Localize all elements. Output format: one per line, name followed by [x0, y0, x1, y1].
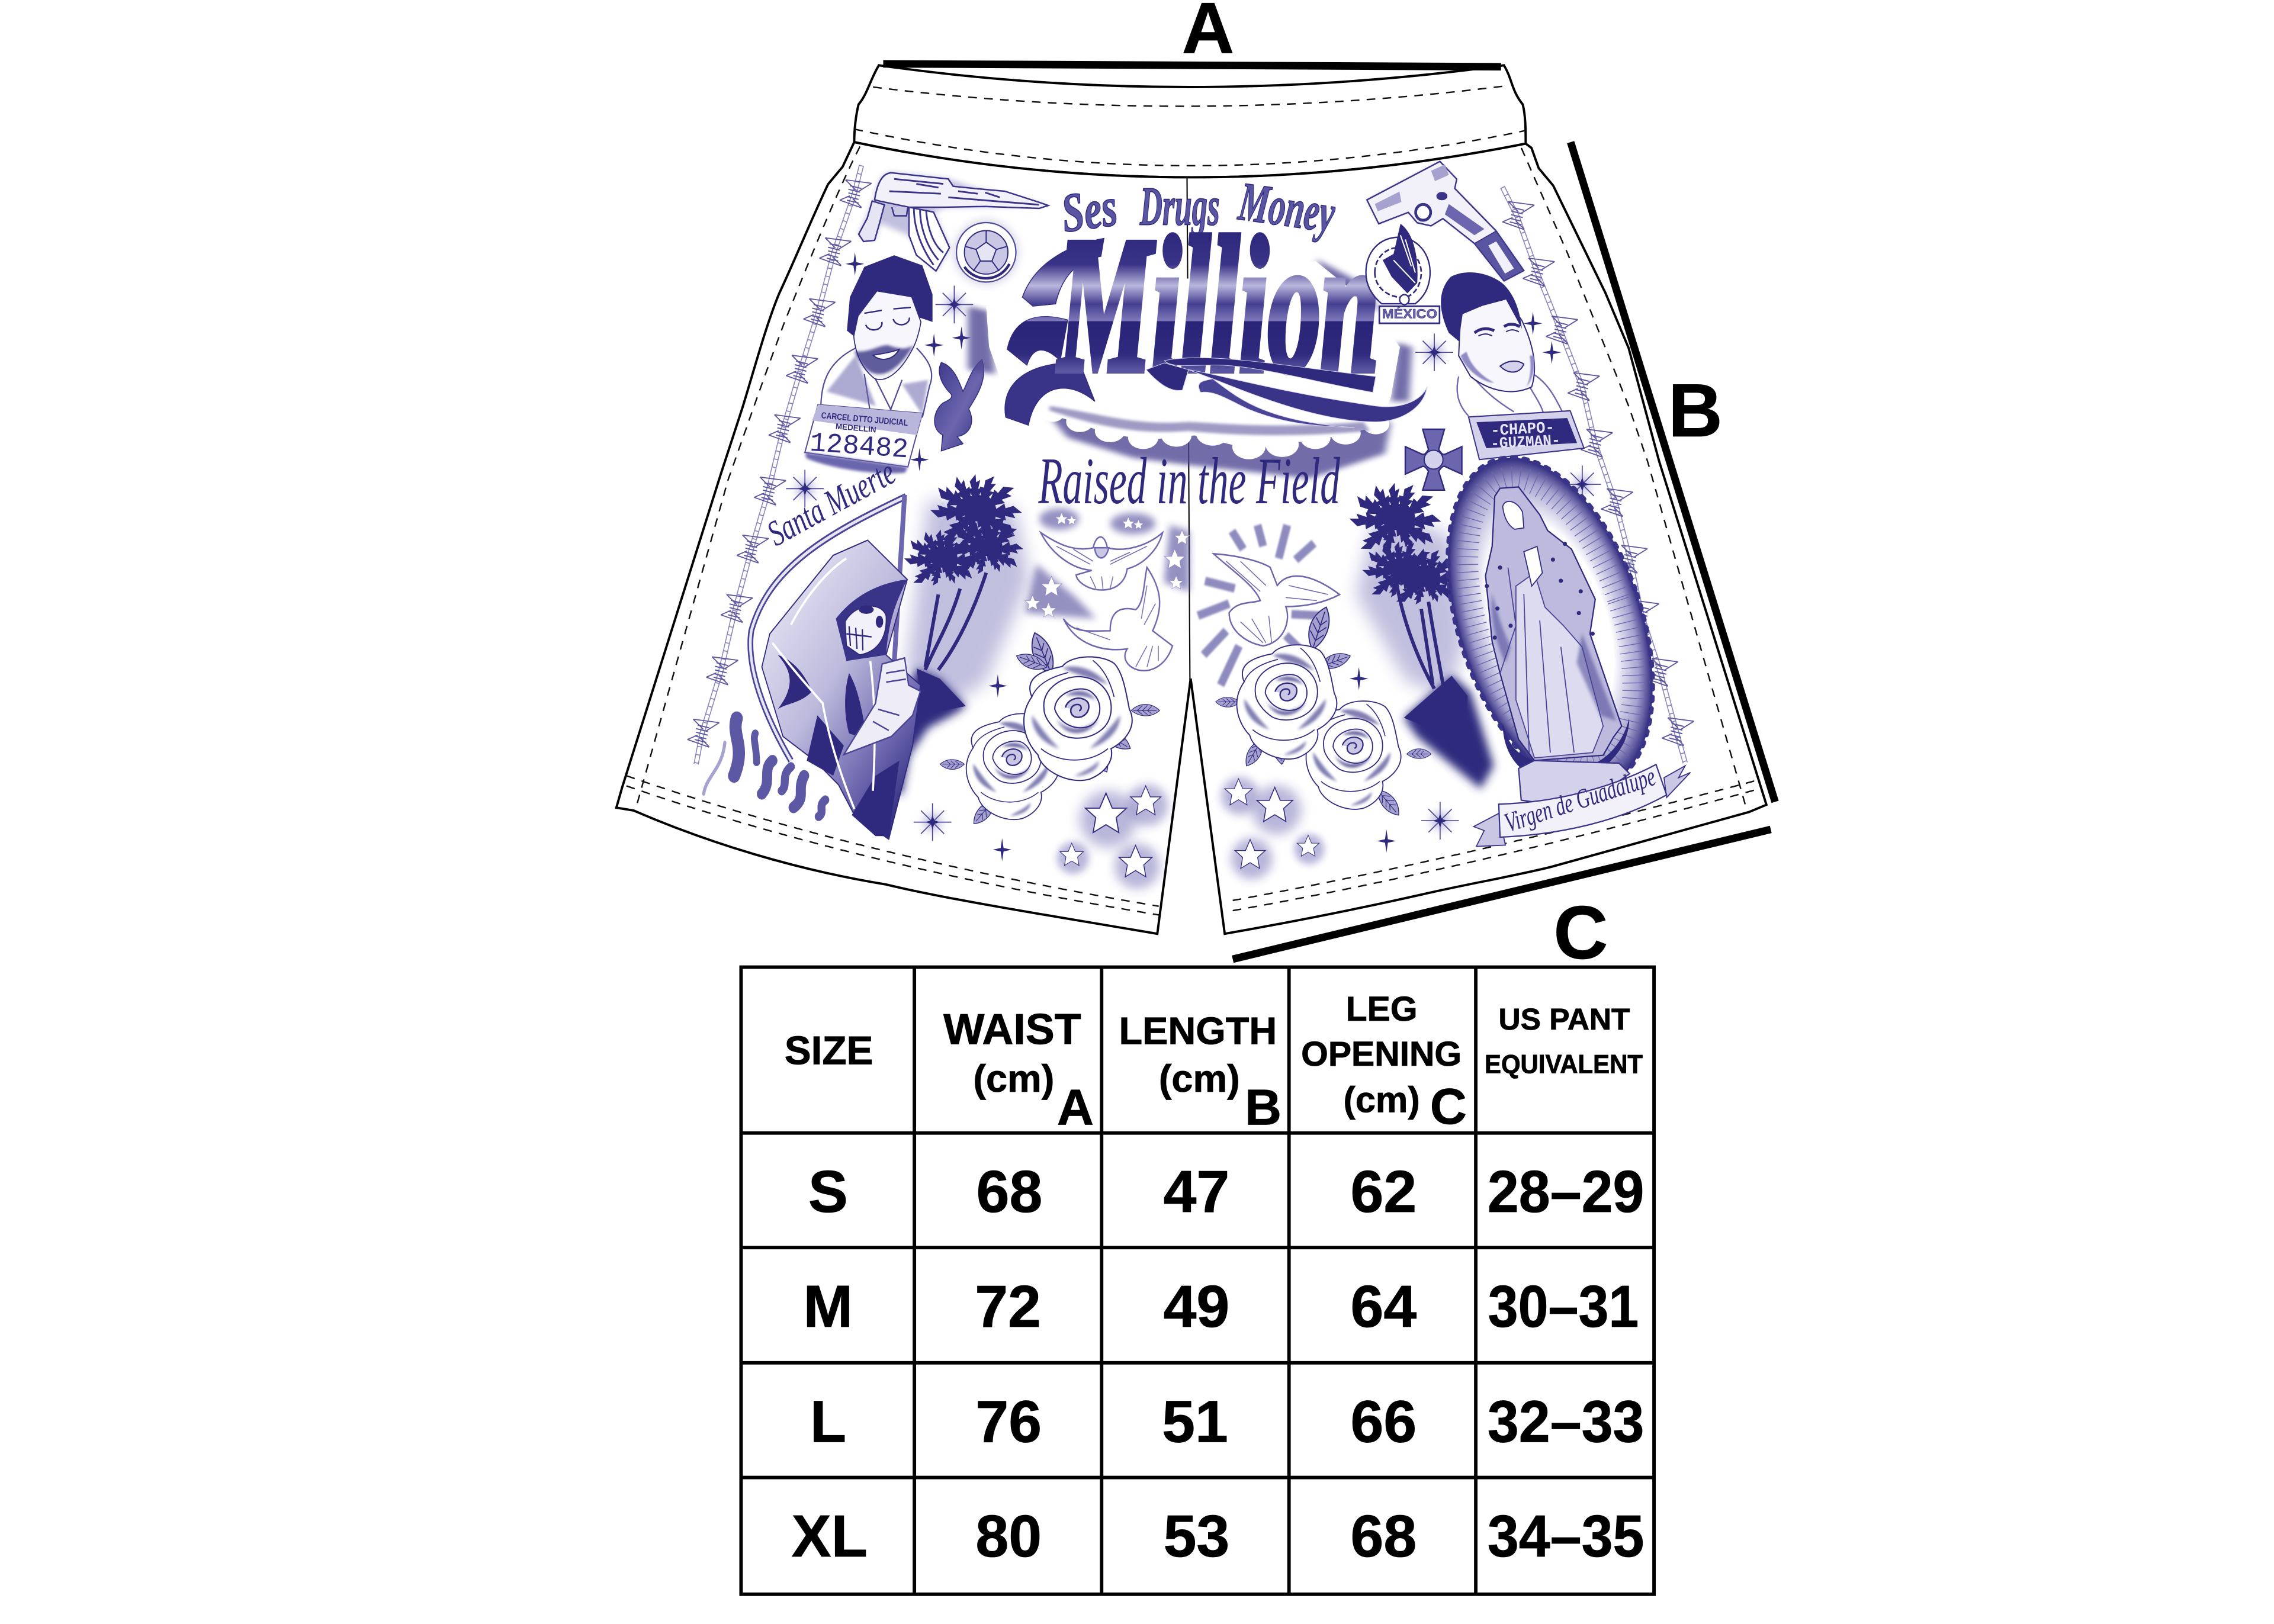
row S: S — [808, 1159, 848, 1225]
row M: M — [804, 1274, 853, 1340]
right barbed wire — [1502, 187, 1694, 763]
script: Santa Muerte: Santa Muerte — [760, 452, 902, 554]
magazine ribs — [914, 208, 943, 265]
dove three — [1213, 554, 1340, 646]
iron cross — [1405, 429, 1462, 490]
header: length: B — [1245, 1079, 1281, 1136]
gun — [1367, 162, 1524, 281]
garment: shorts — [616, 65, 1766, 934]
row L: 51 — [1162, 1388, 1228, 1455]
rifle glow — [859, 173, 1048, 271]
robe — [762, 540, 920, 839]
receiver details — [889, 179, 1039, 205]
row S: 68 — [977, 1159, 1042, 1225]
header: leg opening — [1301, 990, 1467, 1135]
shirt shading — [827, 355, 928, 414]
dove one — [1040, 533, 1162, 590]
left island — [885, 668, 966, 795]
script: Raised in the Field: Raised in the Field — [1038, 445, 1340, 518]
central logo with clouds — [968, 198, 1427, 478]
banner tails — [1473, 766, 1691, 847]
measurement line B — [1570, 142, 1775, 802]
skeletal hands — [844, 658, 920, 755]
skull teeth — [846, 626, 872, 651]
placard — [805, 404, 923, 467]
mantle — [1486, 487, 1621, 761]
tattoo artwork — [688, 162, 1694, 889]
crescent moon — [1503, 718, 1629, 782]
face — [854, 288, 921, 380]
medallion scalloped edge — [1409, 431, 1691, 815]
banner strip — [1499, 764, 1666, 837]
row XL: 34–35 — [1488, 1503, 1644, 1570]
face — [1503, 501, 1524, 529]
badge label: MÉXICO — [1382, 307, 1437, 321]
header: length: LENGTH — [1119, 1009, 1277, 1052]
row S: 28–29 — [1488, 1159, 1644, 1225]
Guadalupe medallion — [1409, 431, 1691, 847]
roses — [940, 604, 1431, 828]
header: length: (cm) — [1159, 1057, 1240, 1100]
scythe — [750, 495, 906, 836]
swoosh ribbons — [1146, 358, 1427, 427]
medallion aura — [1409, 431, 1691, 815]
robe dark folds — [778, 655, 900, 836]
beard — [854, 345, 914, 374]
hair — [847, 255, 933, 336]
flames — [704, 718, 826, 816]
header: waist: A — [1057, 1079, 1094, 1136]
swash bowl — [1005, 363, 1095, 425]
dove two — [1064, 567, 1173, 671]
waistband outline — [854, 65, 1525, 177]
row XL: 80 — [975, 1503, 1042, 1570]
stitching — [627, 86, 1759, 915]
name plate text — [1491, 420, 1560, 454]
finger lines — [873, 670, 906, 731]
name plate text: -CHAPO- — [1491, 420, 1555, 440]
header: waist — [943, 1004, 1094, 1136]
row M: 30–31 — [1488, 1274, 1639, 1340]
label C: C — [1553, 890, 1608, 975]
shirt — [821, 348, 932, 420]
shorts body outline — [616, 142, 1766, 934]
row S — [808, 1159, 1644, 1225]
skull — [845, 606, 887, 655]
header: size: SIZE — [785, 1029, 873, 1073]
row M: 72 — [975, 1274, 1041, 1340]
hood shadow — [836, 580, 907, 661]
rifle magazine — [909, 207, 949, 271]
size table — [741, 967, 1654, 1594]
row XL: XL — [792, 1503, 868, 1570]
header: US pant equivalent: US PANT — [1499, 1002, 1630, 1036]
doves and airbrush — [1025, 509, 1340, 685]
tattoo artwork: Million — [1057, 198, 1379, 411]
rays — [1433, 457, 1667, 789]
row L: L — [810, 1388, 846, 1455]
name plate text: -GUZMAN- — [1491, 432, 1560, 454]
placard band — [812, 404, 923, 435]
rifle — [859, 173, 1048, 271]
placard title: CARCEL DTTO JUDICIAL — [821, 411, 908, 428]
inner cloud shading — [1049, 406, 1370, 435]
right island — [1404, 676, 1493, 789]
measurement line C — [1233, 829, 1771, 959]
centre seam — [1187, 177, 1190, 681]
portrait: man with name plate — [1441, 272, 1584, 459]
measurement line A — [883, 64, 1501, 67]
row L: 32–33 — [1488, 1388, 1644, 1455]
left swash initial — [1007, 238, 1104, 365]
header: waist: (cm) — [973, 1057, 1054, 1100]
left barbed wire — [688, 165, 872, 764]
row M — [804, 1274, 1639, 1340]
header: length — [1119, 1009, 1281, 1136]
header: US pant equivalent — [1485, 1002, 1643, 1079]
glasses and brows — [865, 307, 911, 330]
placard number: 128482 — [809, 427, 910, 465]
row XL: 68 — [1350, 1503, 1417, 1570]
trigger guard — [892, 207, 908, 216]
bunny logo — [934, 359, 984, 451]
header: waist: WAIST — [943, 1004, 1081, 1053]
heading: Ses Drugs Money: Drugs — [1139, 176, 1220, 237]
Mexico badge — [1366, 224, 1440, 323]
heading: Ses Drugs Money: Ses — [1058, 176, 1121, 245]
header: leg opening: OPENING — [1301, 1035, 1462, 1073]
row M: 49 — [1164, 1274, 1229, 1340]
row S: 47 — [1164, 1159, 1229, 1225]
reaper figure — [704, 495, 920, 839]
row L: 66 — [1350, 1388, 1417, 1455]
robe folds — [1500, 568, 1574, 752]
hands — [1524, 546, 1543, 586]
sparkle stars — [786, 252, 1601, 861]
airbrush shading behind left doves — [1025, 509, 1190, 619]
row L: 76 — [975, 1388, 1042, 1455]
rifle stock and grip — [859, 201, 885, 242]
row L — [810, 1388, 1644, 1455]
soccer federation badge — [954, 220, 1018, 284]
heading: Ses Drugs Money — [1058, 171, 1339, 245]
portrait: mugshot man — [805, 255, 933, 473]
rays behind right dove — [1198, 525, 1322, 685]
row XL: 53 — [1164, 1503, 1229, 1570]
heading: Ses Drugs Money: Money — [1235, 171, 1339, 245]
dress — [1516, 573, 1603, 758]
rifle receiver and barrel — [875, 173, 1048, 208]
row S: 62 — [1350, 1159, 1417, 1225]
row XL — [792, 1503, 1644, 1570]
right palm trees — [1348, 481, 1464, 696]
header: leg opening: (cm) — [1344, 1079, 1420, 1120]
cloud shadows — [968, 259, 1412, 478]
small stars near doves — [1025, 513, 1190, 617]
placard underside — [805, 452, 908, 473]
table grid — [741, 967, 1654, 1594]
teeth smile — [873, 349, 899, 359]
outlined stars — [1057, 777, 1324, 889]
cloud bodies — [986, 261, 1400, 459]
label B: B — [1668, 368, 1723, 452]
skull eye left — [859, 606, 873, 614]
row M: 64 — [1350, 1274, 1417, 1340]
robe white highlights — [772, 558, 875, 809]
header: leg opening: C — [1430, 1078, 1467, 1135]
header: leg opening: LEG — [1346, 990, 1418, 1028]
placard city: MEDELLIN — [835, 422, 876, 434]
mantle shading — [1492, 594, 1617, 721]
angel base — [1518, 761, 1630, 803]
script: Virgen de Guadalupe: Virgen de Guadalupe — [1501, 761, 1659, 838]
skull eye right — [876, 616, 883, 628]
mantle stars — [1485, 542, 1595, 640]
header: US pant equivalent: EQUIVALENT — [1485, 1050, 1643, 1079]
left palm trees — [903, 472, 1030, 710]
